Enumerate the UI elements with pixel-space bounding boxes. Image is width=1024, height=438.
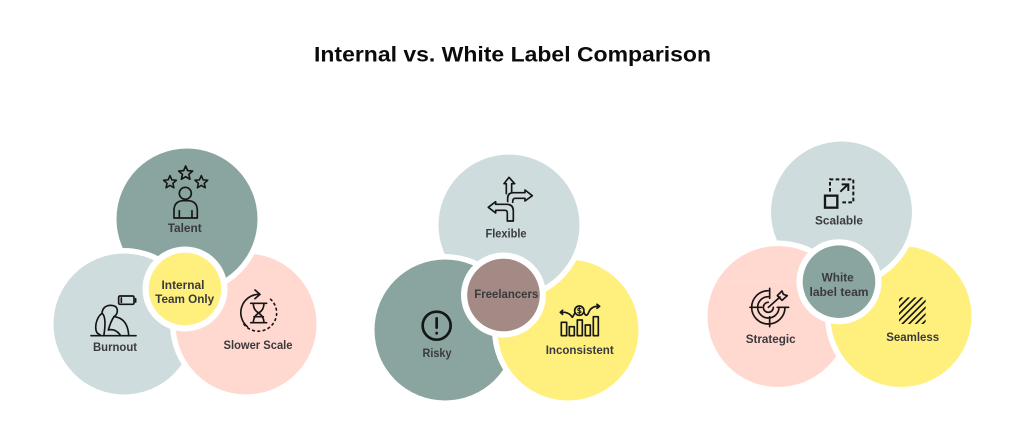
- center: internal team only: [142, 246, 228, 332]
- label: talent: Talent: [168, 221, 202, 235]
- circle: inconsistent: [492, 254, 644, 406]
- icon: warning: [423, 312, 451, 340]
- label: seamless: Seamless: [886, 330, 939, 344]
- panel: white label team venn: [702, 136, 977, 392]
- panel: internal team venn: [48, 143, 322, 400]
- circle: scalable: [766, 136, 918, 288]
- circle: slower scale: [170, 248, 322, 400]
- icon: fluctuating bars: [560, 304, 600, 336]
- center: white label team: label team: [810, 287, 868, 299]
- label: burnout: Burnout: [93, 340, 137, 354]
- icon: scaling squares: [825, 179, 853, 208]
- center: freelancers: [461, 252, 546, 338]
- icon: branching arrows: [488, 177, 532, 221]
- center: internal team only: Team Only: [155, 294, 215, 306]
- circle: burnout: [54, 254, 194, 394]
- label: slower scale: Slower Scale: [224, 338, 293, 352]
- center: white label team: White: [822, 273, 854, 285]
- icon: hourglass cycle: [241, 290, 277, 331]
- title: Internal vs. White Label Comparison: [314, 42, 711, 66]
- panel: freelancers venn: [369, 149, 644, 406]
- icon: burnout person: [91, 296, 136, 336]
- circle: flexible: [433, 149, 585, 301]
- circle: seamless: [825, 246, 972, 387]
- circle: talent: [111, 143, 263, 295]
- center: white label team: [796, 239, 882, 324]
- label: inconsistent: Inconsistent: [546, 343, 614, 357]
- circle: strategic: [708, 246, 848, 387]
- center: internal team only: Internal: [162, 280, 204, 292]
- label: flexible: Flexible: [486, 227, 527, 241]
- icon: hatched square: [898, 297, 926, 324]
- center: freelancers: Freelancers: [474, 289, 538, 301]
- label: strategic: Strategic: [746, 332, 796, 346]
- label: risky: Risky: [422, 346, 452, 360]
- icon: person with stars: [164, 166, 208, 218]
- circle: risky: [374, 260, 516, 400]
- label: scalable: Scalable: [815, 213, 863, 227]
- icon: target and arrow: [750, 288, 789, 327]
